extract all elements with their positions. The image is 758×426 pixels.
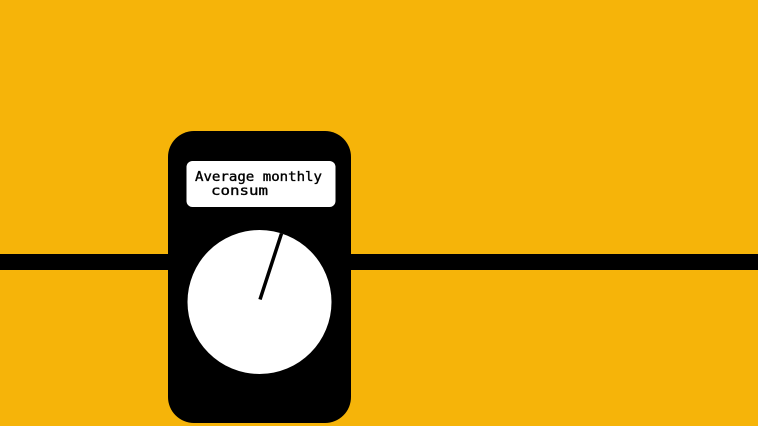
dial face (188, 230, 332, 374)
horizontal cable (0, 254, 758, 270)
meter device (168, 131, 351, 423)
panel background (186, 161, 336, 207)
dial needle (260, 234, 282, 300)
panel text line 1: Average monthly (195, 170, 322, 185)
panel text line 2: consum (211, 184, 268, 199)
meter body (168, 131, 351, 423)
gauge dial (188, 230, 332, 374)
label panel (186, 161, 336, 207)
